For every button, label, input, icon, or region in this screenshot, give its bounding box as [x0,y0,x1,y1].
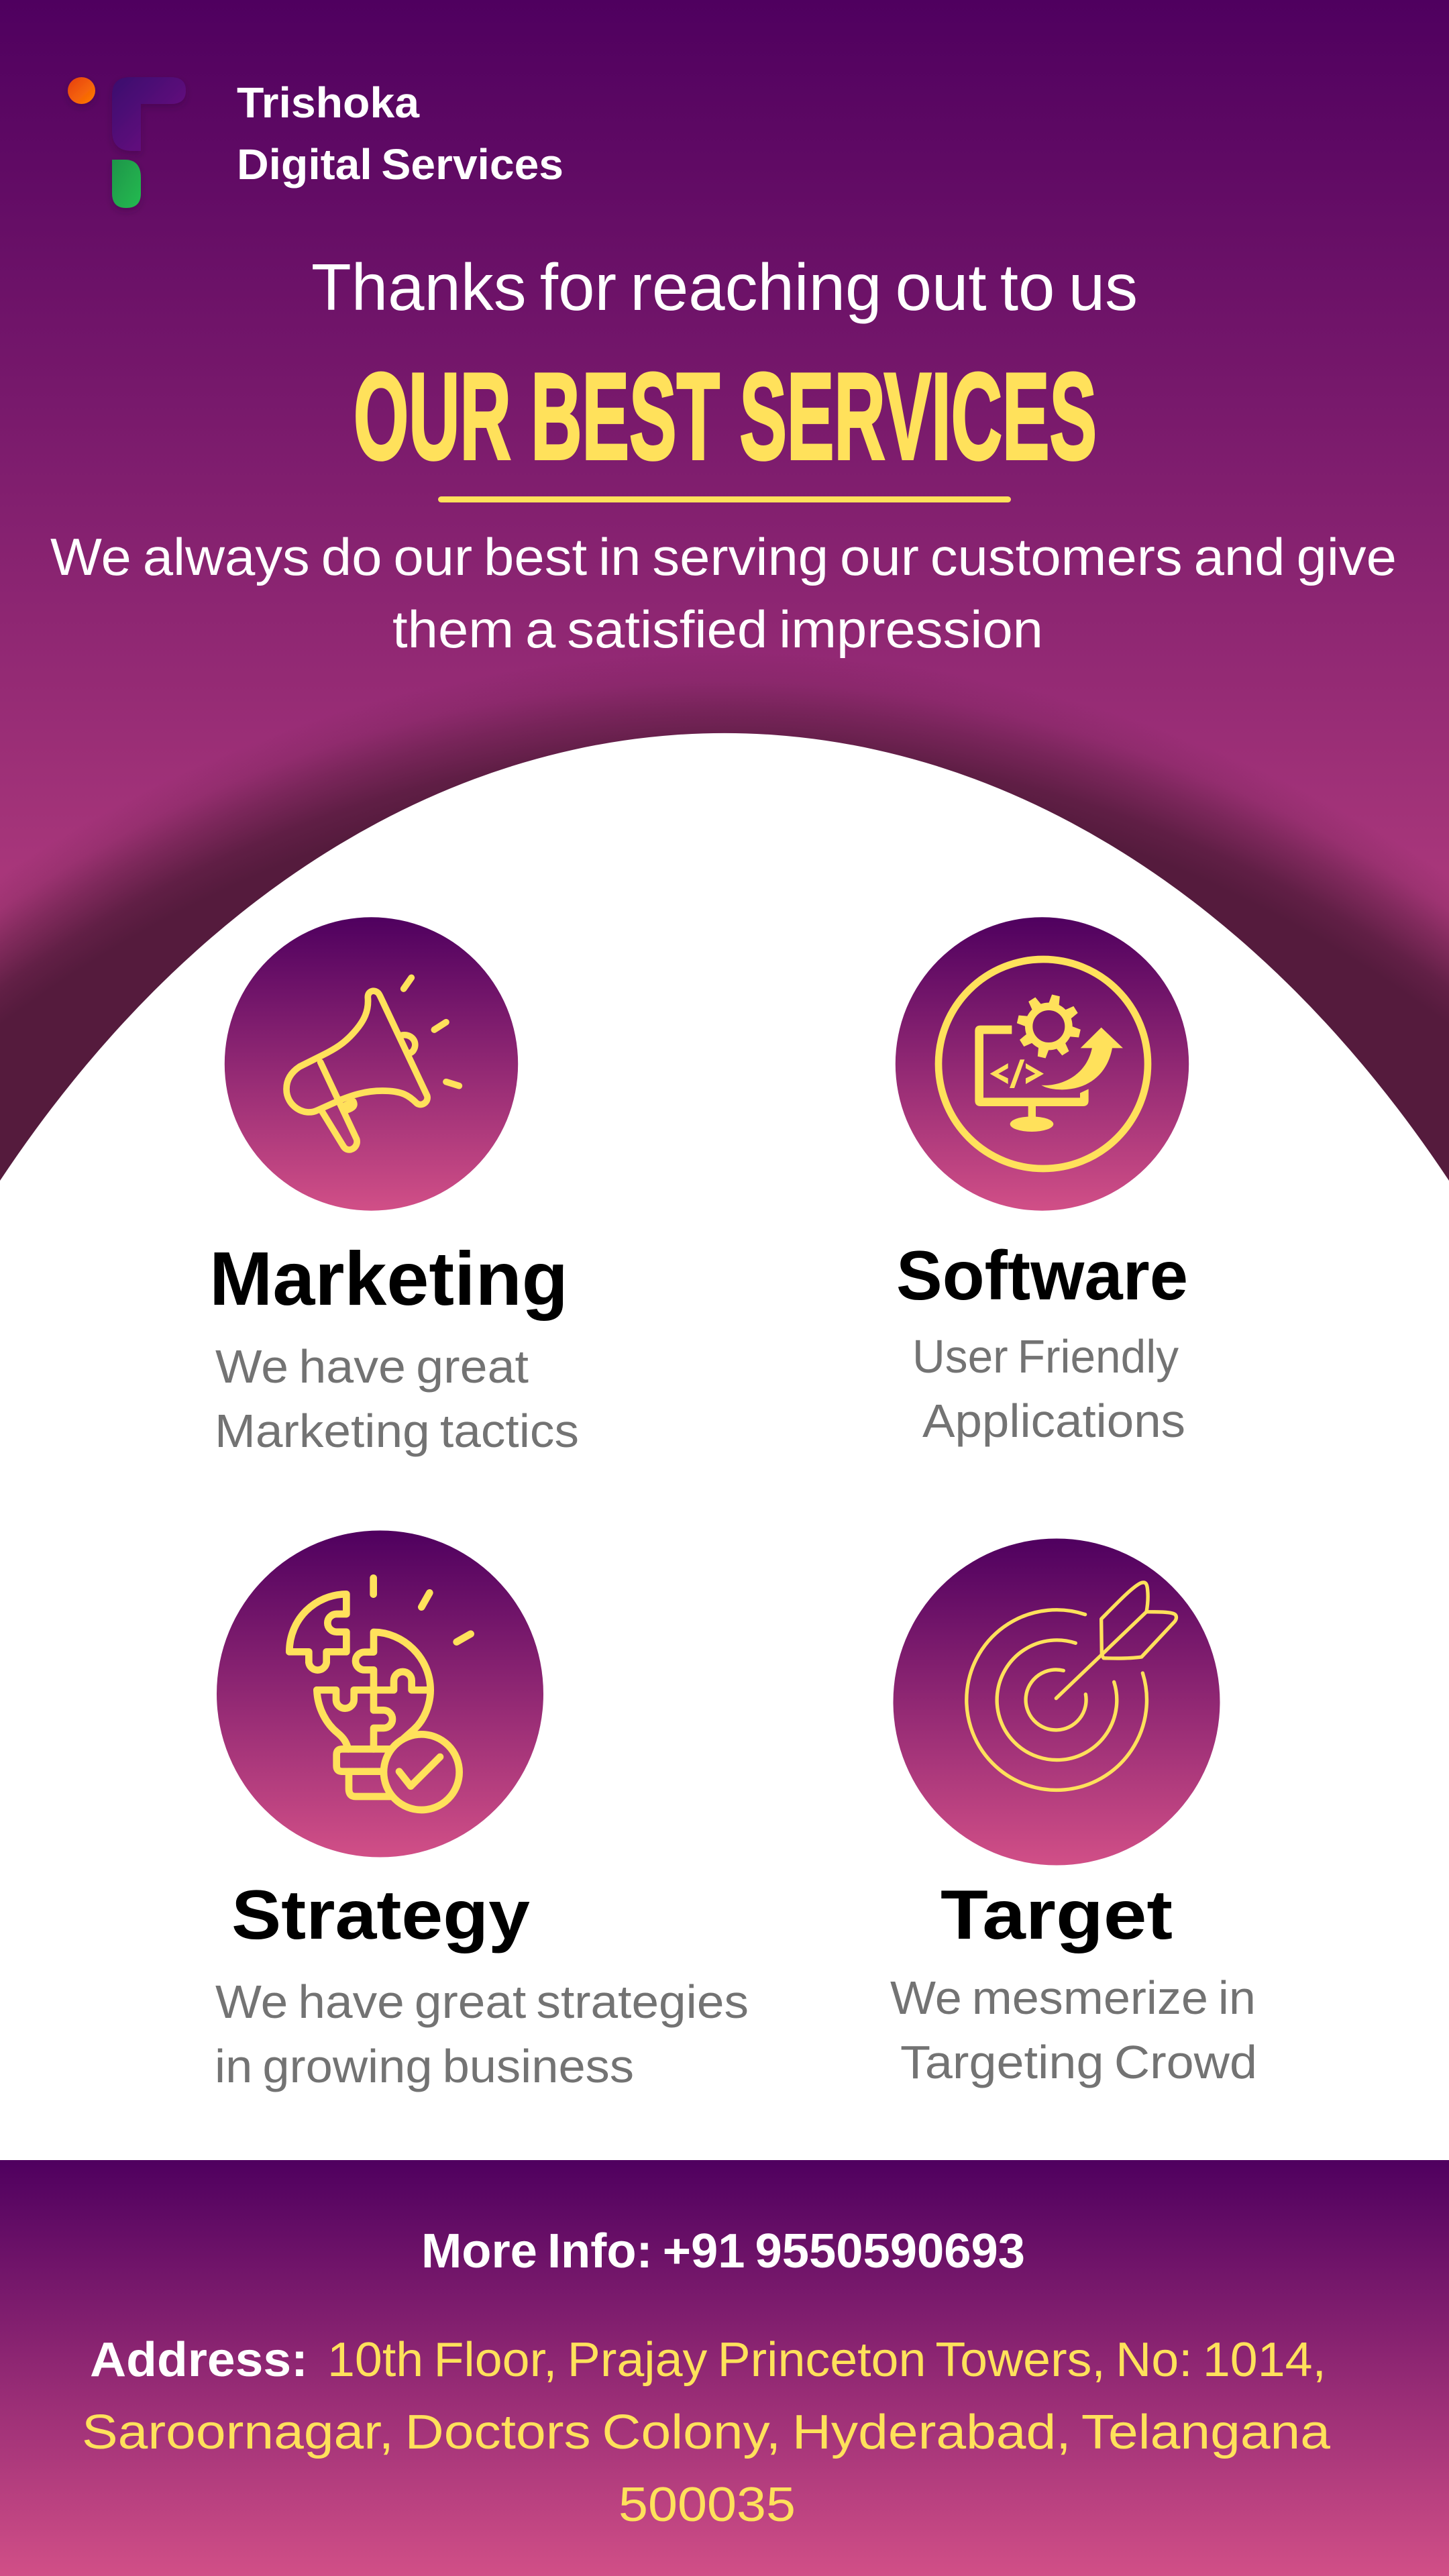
software heading: Software [896,1237,1188,1315]
icon: megaphone [286,977,459,1150]
target description: Targeting Crowd [900,2036,1257,2088]
logo: green stem [112,160,141,208]
marketing description: We have great [215,1340,529,1393]
marketing description [215,1340,579,1457]
marketing heading: Marketing [209,1236,568,1321]
logo: purple T bar [112,77,186,151]
address: Saroornagar, Doctors Colony, Hyderabad, Telangana [82,2406,1331,2459]
title underline [438,496,1011,502]
address: Address: [90,2333,308,2387]
arch shadow [0,604,1449,1275]
intro paragraph: them a satisfied impression [392,600,1043,659]
address [82,2333,1331,2532]
target description: We mesmerize in [890,1972,1256,2024]
footer band [0,2160,1449,2576]
target description [890,1972,1257,2088]
strategy description: in growing business [215,2040,634,2092]
strategy description [215,1976,749,2092]
brand name [237,78,564,189]
icon: software monitor with gear and arrow [938,959,1148,1169]
software description: Applications [922,1395,1185,1447]
icon: target with arrow [967,1582,1176,1790]
strategy description: We have great strategies [215,1976,749,2028]
background: top gradient [0,0,1449,1275]
white arch panel [0,733,1449,2167]
target heading: Target [941,1876,1173,1954]
intro paragraph [50,527,1397,659]
phone contact: More Info: +91 9550590693 [421,2224,1025,2278]
intro paragraph: We always do our best in serving our customers and give [50,527,1397,586]
software description: User Friendly [912,1330,1179,1383]
strategy disc [217,1531,543,1857]
strategy heading: Strategy [231,1876,530,1954]
address: 10th Floor, Prajay Princeton Towers, No: 1014, [327,2333,1326,2387]
target disc [894,1539,1220,1865]
logo [68,77,186,208]
brand name: Digital Services [237,140,564,189]
icon: puzzle light bulb with check [289,1578,471,1810]
logo: orange dot [68,77,95,104]
software disc [896,917,1189,1211]
software description [912,1330,1185,1447]
greeting: Thanks for reaching out to us [311,250,1138,324]
marketing description: Marketing tactics [215,1405,579,1457]
brand name: Trishoka [237,78,419,127]
marketing disc [225,917,518,1211]
address: 500035 [619,2478,796,2532]
